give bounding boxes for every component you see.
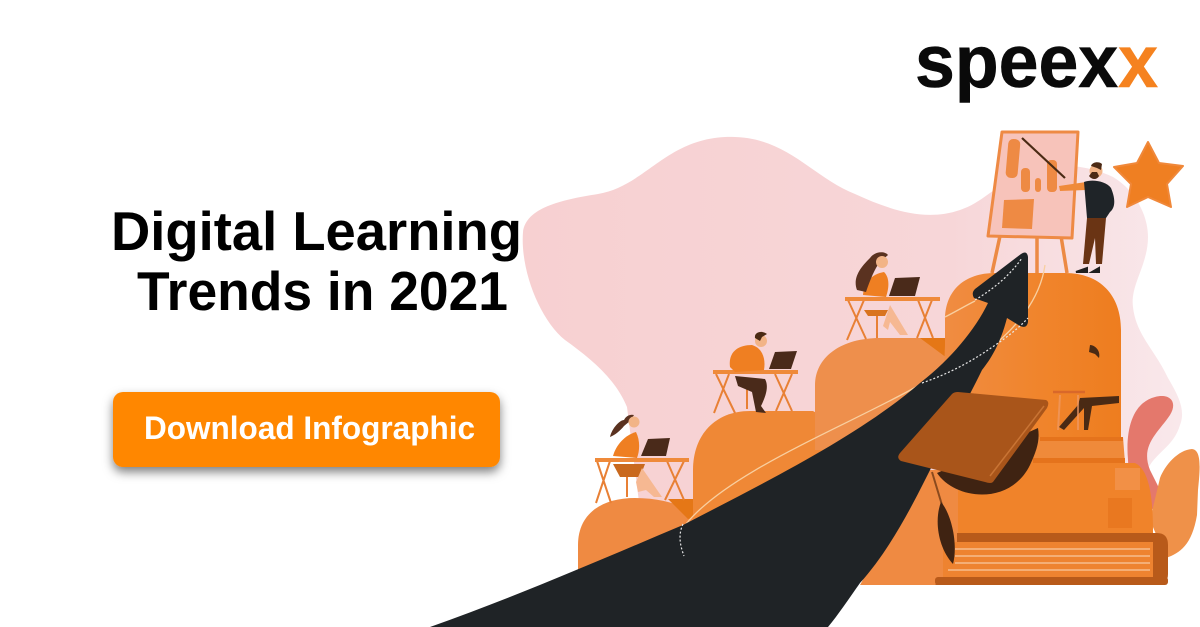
desk and learner, middle — [713, 332, 798, 413]
curved path line — [686, 265, 1045, 524]
hill 3 — [815, 338, 976, 450]
small top book — [1033, 437, 1125, 463]
black rising arrow — [430, 253, 1028, 627]
stacked book — [958, 463, 1153, 533]
pink plant leaf — [1127, 396, 1173, 510]
logo speexx: speexx — [915, 20, 1158, 103]
download button — [113, 392, 500, 467]
presenter figure — [1022, 138, 1114, 272]
hill 3 shadow — [920, 338, 965, 358]
ground block beneath arrow — [860, 470, 960, 585]
dotted path on arrow — [680, 258, 1028, 556]
flip chart presentation board — [988, 132, 1078, 273]
chart bars — [1002, 139, 1057, 229]
desk and learner, top — [845, 252, 940, 340]
title: Digital Learning — [111, 201, 522, 262]
upper seated figure on column — [1053, 345, 1119, 430]
download button: Download Infographic — [144, 410, 475, 446]
hill 1 — [578, 498, 715, 570]
hill 2 — [693, 411, 880, 530]
graduation cap icon — [898, 392, 1048, 564]
desk and learner, bottom — [595, 415, 689, 503]
star icon — [1114, 142, 1183, 207]
hill 4 large orange column — [940, 273, 1121, 470]
title — [111, 201, 522, 322]
background pink blob — [523, 137, 1182, 510]
orange plant leaf — [1150, 449, 1200, 558]
bottom large book — [935, 533, 1168, 585]
title: Trends in 2021 — [137, 261, 508, 322]
hill 1 shadow — [668, 499, 720, 519]
